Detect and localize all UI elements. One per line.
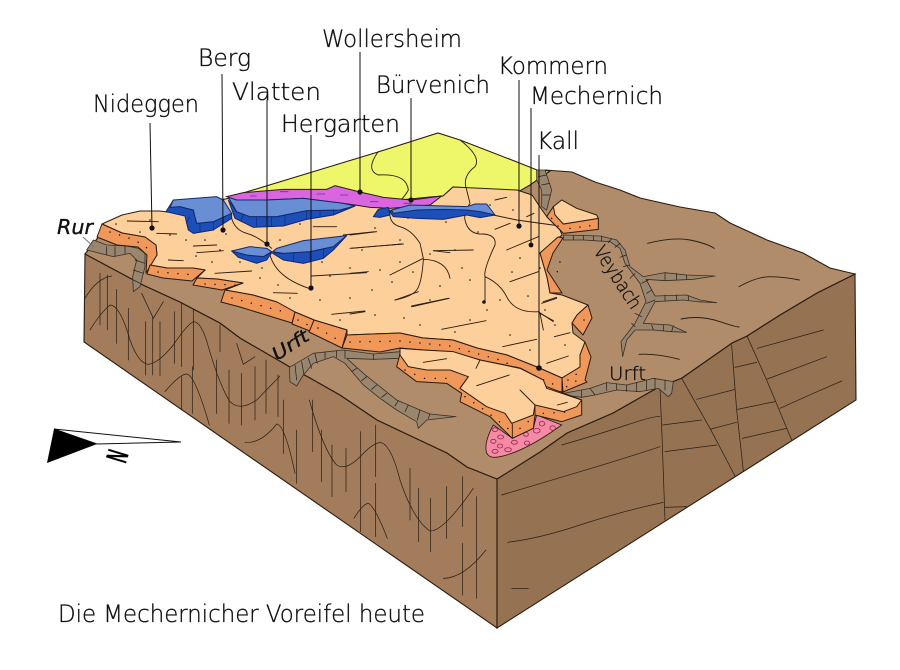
lake: east [373, 204, 495, 219]
block: top land surface [85, 170, 855, 479]
stream gorge: north-east headwater [537, 170, 552, 210]
dots on the orange strips [110, 232, 584, 385]
town labels: Hergarten [281, 110, 400, 138]
folded strata on left face [85, 273, 486, 598]
lake: west [166, 197, 232, 233]
outlier surface [400, 348, 582, 423]
river labels: Veybach [589, 242, 646, 313]
blue lakes [166, 197, 355, 263]
plateau streams and short lines [127, 140, 570, 363]
stream gorge: Rur [87, 240, 145, 292]
title caption: Die Mechernicher Voreifel heute [58, 600, 425, 628]
block: right side face [497, 274, 856, 628]
town labels: Mechernich [530, 82, 663, 110]
lake: lower left [232, 247, 272, 263]
town labels [93, 25, 663, 155]
stream valley: Urft west [289, 350, 456, 428]
yellow geological unit [243, 133, 550, 205]
town labels: Nideggen [93, 90, 199, 118]
strata and fault lines on right face [502, 330, 842, 588]
scattered dots on plateau [116, 205, 565, 350]
town labels: Bürvenich [376, 71, 490, 99]
stream valley: Urft east [563, 378, 673, 397]
north-east outlier [547, 200, 598, 233]
orange rim of outlier [397, 354, 582, 438]
pink conglomerate outcrop [486, 415, 562, 457]
lake: central [228, 197, 355, 227]
block: left side face [84, 254, 497, 628]
river labels: Urft [609, 363, 646, 385]
north arrow: N [99, 446, 133, 466]
town labels: Vlatten [232, 78, 321, 106]
peach plateau surface [102, 187, 588, 378]
south-east outlier plateau [397, 348, 583, 457]
orange sandstone scarp strips [97, 224, 592, 392]
town labels: Kommern [498, 52, 608, 80]
north arrow [47, 429, 181, 466]
town labels: Wollersheim [322, 25, 462, 53]
river labels: Rur [57, 215, 95, 239]
surface contour lines [639, 239, 799, 359]
river labels: Urft [268, 325, 314, 365]
river labels [57, 215, 646, 385]
town labels: Kall [537, 127, 579, 155]
town labels: Berg [198, 44, 251, 72]
place markers and leader lines [149, 52, 542, 371]
lake: lower right [272, 236, 347, 263]
purple geological unit [227, 186, 442, 208]
stream valley: Veybach [563, 235, 717, 357]
